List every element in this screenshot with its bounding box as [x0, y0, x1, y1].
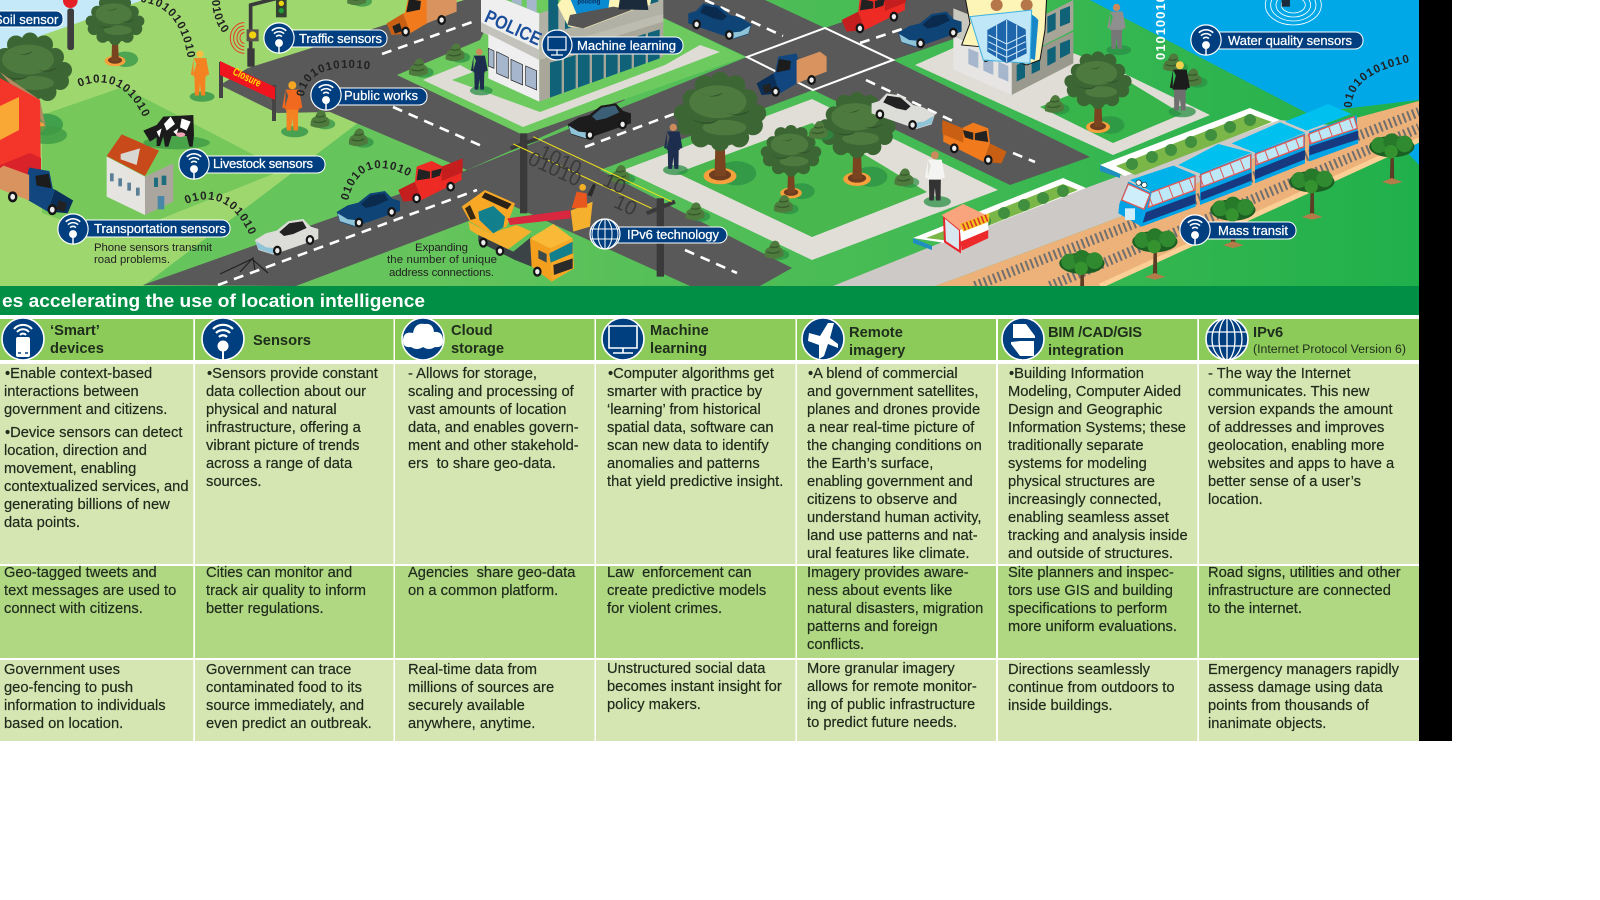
body text: remote imagery: citizens to observe and: [807, 492, 957, 508]
label: traffic sensors: Traffic sensors: [299, 31, 382, 46]
bottom row text: securely available: [408, 698, 525, 714]
grass base: [0, 0, 1419, 286]
bottom row text: allows for remote monitor-: [807, 679, 977, 695]
middle row text: infrastructure are connected: [1208, 583, 1391, 599]
bottom row text: [4, 661, 1400, 732]
annotation: phone sensors: road problems.: [94, 254, 170, 266]
body text: smart devices: •Enable context-based: [5, 366, 152, 382]
middle row text: ness about events like: [807, 583, 952, 599]
farmhouse: [107, 134, 173, 215]
tree: behind barn: [0, 32, 72, 136]
body text: smart devices: data points.: [4, 515, 80, 531]
body text: sensors: data collection about our: [206, 384, 366, 400]
column headings: BIM /CAD/GIS: [1048, 325, 1142, 341]
utility poles and wires: 01010: [525, 148, 584, 191]
label: machine learning: Machine learning: [577, 38, 676, 53]
mid green field: [42, 87, 283, 238]
body text: machine learning: that yield predictive insight.: [607, 474, 783, 490]
body text: cloud storage: scaling and processing of: [408, 384, 575, 400]
building block sidewalk: [915, 45, 1210, 155]
body text: cloud storage: ment and other stakehold-: [408, 438, 579, 454]
utility poles and wires: [511, 133, 675, 277]
body text: smart devices: •Device sensors can detect: [5, 425, 182, 441]
middle row text: Agencies share geo-data: [408, 565, 576, 581]
round trees along rail: [1059, 133, 1415, 301]
column headings: IPv6: [1253, 325, 1283, 341]
bottom row text: even predict an outbreak.: [206, 716, 372, 732]
body text: machine learning: scan new data to identify: [607, 438, 769, 454]
bottom row text: assess damage using data: [1208, 680, 1384, 696]
body text: cloud storage: ers to share geo-data.: [408, 456, 556, 472]
bottom row text: information to individuals: [4, 698, 166, 714]
icon: smart device: [2, 318, 44, 360]
header row: [0, 319, 1419, 360]
bottom row text: Real-time data from: [408, 662, 537, 678]
column headings: devices: [50, 341, 104, 357]
body text: remote imagery: land use patterns and nat-: [807, 528, 978, 544]
illustrated city scene: [0, 0, 1419, 286]
building two: [953, 0, 1073, 95]
bottom row text: inanimate objects.: [1208, 716, 1326, 732]
column headings: ‘Smart’: [50, 323, 100, 339]
hedge strip upper: [1100, 108, 1280, 178]
body text: machine learning: [607, 366, 783, 490]
middle row text: [4, 565, 1401, 653]
body text: cloud storage: [408, 366, 579, 472]
middle row text: connect with citizens.: [4, 601, 143, 617]
bottom row text: policy makers.: [607, 697, 701, 713]
middle row text: Cities can monitor and: [206, 565, 352, 581]
bottom row text: Government can trace: [206, 662, 351, 678]
road lane dashes: [218, 0, 1035, 285]
body text: smart devices: movement, enabling: [4, 461, 136, 477]
black right edge bar: [1419, 0, 1452, 741]
annotation: phone sensors: [94, 242, 213, 266]
title band: [0, 286, 1419, 315]
column headings: Remote: [849, 325, 903, 341]
middle row text: track air quality to inform: [206, 583, 366, 599]
railway bed: [935, 101, 1419, 286]
vehicles: [0, 0, 1007, 256]
cow: [143, 115, 210, 149]
body text: smart devices: contextualized services, and: [4, 479, 189, 495]
binary data streams: 01010: [212, 0, 228, 32]
park sidewalk: [623, 99, 998, 260]
utility poles and wires: 10: [611, 191, 640, 221]
column headings: imagery: [849, 343, 906, 359]
binary data streams: 01010101010: [78, 74, 150, 116]
annotation: expanding addresses: the number of unique: [387, 254, 497, 266]
label: water quality sensors: Water quality sensors: [1228, 33, 1352, 48]
body text: smart devices: location, direction and: [4, 443, 147, 459]
pale sky: [0, 0, 143, 50]
body text: sensors: vibrant picture of trends: [206, 438, 359, 454]
body text: remote imagery: enabling government and: [807, 474, 973, 490]
body text: machine learning: smarter with practice by: [607, 384, 763, 400]
label: public works: Public works: [344, 88, 418, 103]
label: machine learning: [542, 30, 683, 60]
callout: building plans: [962, 0, 1047, 65]
body text: remote imagery: and government satellites,: [807, 384, 978, 400]
body text: remote imagery: understand human activity,: [807, 510, 981, 526]
icon: cloud: [402, 318, 444, 360]
crane truck: [462, 183, 596, 282]
utility poles and wires: 1010: [535, 141, 585, 180]
closure barrier: [219, 61, 276, 121]
middle row text: natural disasters, migration: [807, 601, 983, 617]
body text: cloud storage: - Allows for storage,: [408, 366, 537, 382]
body text: sensors: sources.: [206, 474, 262, 490]
railway edge strip: [1100, 140, 1419, 286]
body text: sensors: physical and natural: [206, 402, 337, 418]
body text: smart devices: generating billions of new: [4, 497, 170, 513]
body text: cloud storage: data, and enables govern-: [408, 420, 579, 436]
body text: remote imagery: [807, 366, 982, 562]
middle row text: more uniform evaluations.: [1008, 619, 1177, 635]
police building: [481, 0, 663, 102]
body text: machine learning: spatial data, software can: [607, 420, 774, 436]
body text: bim cad gis: traditionally separate: [1008, 438, 1144, 454]
body text: bim cad gis: Information Systems; these: [1008, 420, 1186, 436]
table of technologies: [0, 318, 1419, 741]
park lawn: [677, 123, 927, 237]
body text: remote imagery: ural features like climate.: [807, 546, 969, 562]
sensor labels: [0, 11, 1363, 249]
bottom row: [0, 660, 1419, 741]
farm barn: [0, 72, 67, 190]
middle row text: create predictive models: [607, 583, 766, 599]
body text: bim cad gis: and outside of structures.: [1008, 546, 1173, 562]
body text: ipv6: of addresses and improves: [1208, 420, 1384, 436]
column headings: [50, 323, 1406, 359]
label: livestock sensors: [179, 149, 325, 179]
column headings: learning: [650, 341, 707, 357]
body text: smart devices: interactions between: [4, 384, 139, 400]
bottom row text: Unstructured social data: [607, 661, 766, 677]
middle row text: Road signs, utilities and other: [1208, 565, 1401, 581]
bottom row text: Government uses: [4, 662, 120, 678]
column headings: storage: [451, 341, 504, 357]
trees: [86, 0, 1132, 199]
icon: globe: [1206, 318, 1248, 360]
middle row text: for violent crimes.: [607, 601, 722, 617]
sensor poles and signals: [63, 0, 287, 67]
body text: sensors: [206, 366, 378, 490]
body text: ipv6: websites and apps to have a: [1207, 456, 1395, 472]
body text: remote imagery: a near real-time picture of: [807, 420, 975, 436]
light green farmland: [0, 0, 520, 286]
police building: POLICE: [482, 6, 545, 50]
middle row text: on a common platform.: [408, 583, 558, 599]
binary data streams: 01010101010: [1344, 54, 1408, 108]
body text: machine learning: •Computer algorithms get: [608, 366, 774, 382]
water below rail: [1405, 143, 1419, 165]
body text: remote imagery: •A blend of commercial: [808, 366, 958, 382]
body text: bim cad gis: •Building Information: [1009, 366, 1144, 382]
body text: ipv6: communicates. This new: [1208, 384, 1370, 400]
body text: ipv6: better sense of a user’s: [1208, 474, 1361, 490]
body text: smart devices: [4, 366, 189, 531]
bottom row text: points from thousands of: [1208, 698, 1370, 714]
bottom row text: continue from outdoors to: [1008, 680, 1175, 696]
middle row text: Law enforcement can: [607, 565, 752, 581]
label: public works: [311, 80, 427, 110]
body text: remote imagery: the Earth’s surface,: [807, 456, 933, 472]
gray promenade: [833, 120, 1330, 286]
police block sidewalk: [423, 45, 720, 127]
bushes: [311, 0, 1208, 260]
body text: bim cad gis: systems for modeling: [1008, 456, 1147, 472]
road workers: [190, 50, 308, 137]
railway tracks: [975, 112, 1419, 286]
middle row text: specifications to perform: [1008, 601, 1167, 617]
icon: satellite: [802, 318, 844, 360]
body text: sensors: •Sensors provide constant: [207, 366, 378, 382]
body text: ipv6: location.: [1208, 492, 1263, 508]
column headings: Cloud: [451, 323, 493, 339]
callout: predictive policing laptop: [557, 0, 653, 28]
body text: bim cad gis: increasingly connected,: [1008, 492, 1162, 508]
label: transportation sensors: Transportation sensors: [94, 221, 226, 236]
people: [470, 4, 1196, 207]
binary data streams: [78, 0, 1408, 234]
bottom row text: becomes instant insight for: [607, 679, 782, 695]
annotation: phone sensors: Phone sensors transmit: [94, 242, 213, 254]
body text: machine learning: anomalies and patterns: [607, 456, 760, 472]
water: [1090, 0, 1419, 113]
bottom row text: contaminated food to its: [206, 680, 362, 696]
bottom row text: Directions seamlessly: [1008, 662, 1151, 678]
middle row text: Site planners and inspec-: [1008, 565, 1174, 581]
body text: bim cad gis: Design and Geographic: [1008, 402, 1162, 418]
police block lawn: [397, 0, 745, 135]
icon: monitor: [602, 318, 644, 360]
title band: es accelerating the use of location intelligence: [2, 290, 425, 311]
column headings: (Internet Protocol Version 6): [1253, 342, 1406, 356]
body text: smart devices: government and citizens.: [4, 402, 167, 418]
body text: bim cad gis: tracking and analysis inside: [1008, 528, 1188, 544]
middle row text: patterns and foreign: [807, 619, 938, 635]
kiosk: [942, 204, 989, 252]
column headings: integration: [1048, 343, 1124, 359]
water quality ripples: [1265, 0, 1321, 25]
body text: sensors: infrastructure, offering a: [206, 420, 362, 436]
label: mass transit: [1180, 215, 1296, 245]
body text: bim cad gis: enabling seamless asset: [1008, 510, 1169, 526]
utility poles and wires: 10: [600, 170, 629, 199]
middle row text: tors use GIS and building: [1008, 583, 1173, 599]
middle row text: better regulations.: [206, 601, 324, 617]
middle row text: to the internet.: [1208, 601, 1302, 617]
train: [1118, 104, 1358, 227]
label: ipv6 technology: IPv6 technology: [627, 227, 720, 242]
building block lawn: [1040, 75, 1182, 143]
bottom row text: millions of sources are: [408, 680, 554, 696]
body text: sensors: across a range of data: [206, 456, 353, 472]
body text: ipv6: [1207, 366, 1395, 508]
column headings: Machine: [650, 323, 709, 339]
body text: bim cad gis: [1008, 366, 1188, 562]
bottom row text: ing of public infrastructure: [807, 697, 975, 713]
body text: cloud storage: vast amounts of location: [408, 402, 566, 418]
hedge strip lower: [913, 178, 1086, 250]
bottom row text: source immediately, and: [206, 698, 364, 714]
body text: ipv6: - The way the Internet: [1208, 366, 1351, 382]
body text: bim cad gis: Modeling, Computer Aided: [1008, 384, 1181, 400]
middle row text: text messages are used to: [4, 583, 176, 599]
body text: bim cad gis: physical structures are: [1008, 474, 1155, 490]
bottom row text: inside buildings.: [1008, 698, 1113, 714]
intersection crosswalk: [747, 28, 893, 90]
middle row text: Geo-tagged tweets and: [4, 565, 157, 581]
car crash cracks: [220, 258, 268, 274]
icon: documents: [1002, 318, 1044, 360]
label: traffic sensors: [264, 23, 387, 53]
description row: [0, 364, 1419, 564]
middle row text: conflicts.: [807, 637, 864, 653]
bottom row text: anywhere, anytime.: [408, 716, 535, 732]
bottom row text: based on location.: [4, 716, 123, 732]
middle row text: Imagery provides aware-: [807, 565, 969, 581]
annotation: expanding addresses: Expanding: [415, 242, 468, 254]
closure barrier: Closure: [231, 66, 263, 90]
body text: ipv6: geolocation, enabling more: [1208, 438, 1384, 454]
binary data streams: 01010101010: [184, 192, 256, 234]
bottom row text: Emergency managers rapidly: [1208, 662, 1400, 678]
middle row: [0, 566, 1419, 658]
icon: sensor: [202, 318, 244, 360]
body text: remote imagery: the changing conditions on: [807, 438, 982, 454]
bottom row text: More granular imagery: [807, 661, 955, 677]
label: livestock sensors: Livestock sensors: [213, 156, 314, 171]
column headings: Sensors: [253, 333, 311, 349]
label: water quality sensors: [1191, 25, 1363, 55]
label: mass transit: Mass transit: [1218, 223, 1288, 238]
bottom row text: to predict future needs.: [807, 715, 957, 731]
body text: remote imagery: planes and drones provide: [807, 402, 980, 418]
label: transportation sensors: [58, 214, 230, 244]
annotation: expanding addresses: [387, 242, 497, 279]
annotation: expanding addresses: address connections.: [389, 267, 494, 279]
binary data streams: 01010101010: [341, 160, 411, 200]
label: ipv6 technology: [590, 219, 727, 249]
body text: ipv6: version expands the amount: [1208, 402, 1393, 418]
road network: [143, 0, 1090, 286]
binary data streams: 01010101010: [296, 60, 370, 96]
body text: machine learning: ‘learning’ from historical: [607, 402, 761, 418]
bottom row text: geo-fencing to push: [4, 680, 133, 696]
